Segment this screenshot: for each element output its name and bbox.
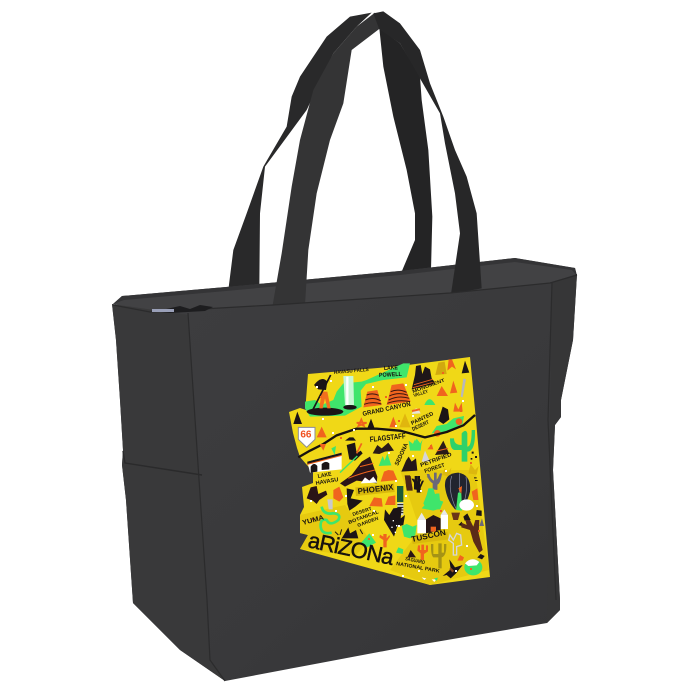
sheep: [459, 499, 474, 511]
orange plant: [333, 487, 343, 502]
southern labels: [302, 483, 447, 575]
back handle left strap: [228, 13, 372, 290]
green cactus cluster: [422, 488, 441, 511]
Havasu Falls label: HAVASU FALLS: [334, 367, 370, 376]
bag body: [112, 274, 577, 681]
black lizard: [443, 559, 463, 578]
right strap: [373, 11, 482, 294]
yellow plant: [468, 464, 479, 475]
green hedgehog cactus: [402, 524, 417, 538]
balloon basket: [451, 513, 460, 520]
butte stripes: [413, 379, 433, 388]
left strap: [273, 13, 380, 305]
Petrified Forest label second line: FOREST: [424, 463, 446, 475]
back handle right strap: [379, 28, 432, 272]
northern labels: [334, 365, 446, 467]
grey cone: [479, 518, 484, 526]
Yuma snake: [321, 507, 339, 533]
Lake Powell label second line: POWELL: [379, 372, 402, 379]
Tuscon label highlight: [411, 532, 449, 544]
waterfall: [343, 376, 354, 405]
Phoenix label: PHOENIX: [357, 483, 395, 496]
orange accent: [458, 486, 462, 494]
small black rock: [407, 550, 416, 557]
waterfall rocks: [343, 405, 357, 410]
east-central illustrations: [379, 439, 479, 509]
mountain: [340, 457, 377, 487]
black cactus centre: [384, 507, 405, 537]
scattered white specks: [310, 380, 478, 577]
green agave near mountain: [379, 453, 391, 466]
cactus dots: [391, 520, 397, 533]
yellow shrub: [442, 467, 451, 477]
olive saguaro: [431, 543, 446, 568]
Grand Canyon label: GRAND CANYON: [362, 401, 412, 418]
small green plant: [331, 446, 336, 455]
Lake Powell label: LAKE: [384, 365, 398, 372]
orange grass: [357, 419, 367, 426]
Route 66 shield: 66: [300, 429, 312, 440]
white spots: [422, 577, 436, 582]
mission church: [417, 509, 448, 533]
front handle: [273, 11, 482, 305]
green agave near Flagstaff: [409, 439, 421, 451]
phoenix bird: [347, 488, 363, 511]
northern illustrations: [293, 359, 475, 462]
Lake Havasu label second line: HAVASU: [315, 477, 339, 487]
Yuma label: YUMA: [302, 514, 325, 527]
green cactus cluster: [423, 488, 443, 509]
London Bridge at Lake Havasu: [307, 453, 342, 473]
Monument Valley label second line: VALLEY: [413, 389, 430, 399]
orange agave: [457, 555, 464, 561]
brown log: [405, 476, 413, 491]
orange rock formations: [369, 495, 395, 507]
orange spikes: [437, 359, 457, 396]
grey cactus: [327, 499, 333, 509]
green saguaro on balloon: [456, 493, 462, 511]
orange trees: [317, 417, 397, 437]
green cactus: [450, 430, 475, 462]
Route 66 shield: [298, 427, 315, 447]
Monument Valley label: MONUMENT: [412, 378, 446, 395]
dome stripe: [412, 409, 420, 411]
Monument Valley butte: [412, 365, 434, 389]
Saguaro National Park label: SAGUARO: [405, 556, 425, 566]
printed Arizona map: [289, 357, 490, 585]
orange Sedona rock: [381, 470, 397, 482]
Lake Powell green water: [305, 363, 410, 417]
green tuft: [396, 547, 403, 554]
orange small rock: [427, 444, 433, 449]
front rim and seams: [113, 275, 577, 681]
Desert Botanical Garden label second line: BOTANICAL: [348, 509, 380, 526]
black trees: [293, 412, 375, 428]
balloon stripes: [450, 473, 467, 509]
Sedona rocks: [401, 457, 417, 472]
Painted Desert label: PAINTED: [410, 411, 435, 427]
orange saguaro: [417, 545, 428, 560]
red rock right: [387, 383, 411, 405]
orange bird: [472, 488, 478, 500]
grey column: [461, 378, 466, 397]
dark cactus: [413, 476, 424, 493]
map background: [289, 357, 490, 585]
Desert Botanical Garden label: DESERT: [352, 506, 373, 518]
Lake Havasu label: LAKE: [317, 472, 332, 480]
black agave: [342, 527, 358, 538]
brown lizard stripe: [450, 568, 453, 572]
dark small cactus: [411, 476, 421, 490]
mountain strata: [348, 463, 375, 478]
big brown saguaro: [461, 520, 483, 553]
green tower: [397, 486, 403, 502]
right side panel: [547, 274, 577, 623]
orange cactus: [379, 534, 390, 547]
green spot: [434, 578, 438, 581]
Saguaro National Park label second line: NATIONAL PARK: [396, 561, 440, 575]
Phoenix label highlight: [355, 483, 395, 496]
green car with driver: [432, 407, 464, 437]
grass tuft: [453, 403, 463, 412]
paddleboarder: [307, 375, 343, 416]
small dots: [471, 452, 478, 481]
tower stripes: [397, 505, 403, 513]
back rim of the bag: [113, 258, 577, 304]
mound stripe: [437, 448, 448, 451]
zipper pull: [151, 305, 213, 313]
Desert Botanical Garden label third line: GARDEN: [357, 516, 380, 529]
balloon: [445, 473, 470, 509]
mountain snow: [361, 477, 377, 483]
central illustrations: [307, 437, 377, 487]
grey cactus: [427, 473, 442, 489]
green aloe: [360, 533, 376, 547]
black flower: [477, 554, 485, 559]
Tuscon label: TUSCON: [411, 528, 447, 544]
darker ochre desert patches: [300, 470, 489, 585]
striped desert dome: [412, 408, 421, 414]
striped tower: [397, 503, 403, 515]
dark lantern: [462, 361, 469, 373]
green agave: [410, 439, 423, 451]
left dark cactus: [307, 486, 327, 504]
back handle: [228, 13, 432, 290]
Flagstaff label: FLAGSTAFF: [369, 431, 406, 444]
white cactus flower: [465, 559, 479, 566]
Flagstaff rocks: [373, 443, 394, 454]
Painted Desert label second line: DESERT: [411, 420, 431, 433]
grey rock: [422, 451, 430, 462]
hiker: [340, 437, 363, 473]
black scatter: [458, 510, 482, 527]
southern illustrations: [307, 473, 485, 582]
bag interior: [113, 258, 577, 312]
painted desert dome: [424, 399, 435, 405]
red rock left: [363, 390, 382, 407]
orange pot: [319, 444, 326, 451]
round green cactus: [464, 559, 482, 575]
Arizona title: aRiZONa: [306, 527, 397, 570]
Petrified Forest label: PETRIFIED: [420, 452, 453, 469]
side panel shading: [112, 304, 225, 681]
Sedona label: SEDONA: [394, 442, 410, 467]
highway: [298, 415, 475, 457]
scattered orange specks: [312, 372, 480, 570]
waterfall stripe: [344, 377, 351, 405]
left pocket: [123, 451, 202, 475]
white cactus: [449, 533, 462, 555]
yellow butte: [435, 362, 447, 375]
rock strata: [364, 390, 410, 404]
petrified logs: [405, 475, 413, 489]
grey cactus upper: [427, 475, 442, 490]
grass sprigs: [335, 529, 363, 535]
dark mound: [435, 441, 449, 455]
yellow-dark tree: [399, 413, 411, 427]
